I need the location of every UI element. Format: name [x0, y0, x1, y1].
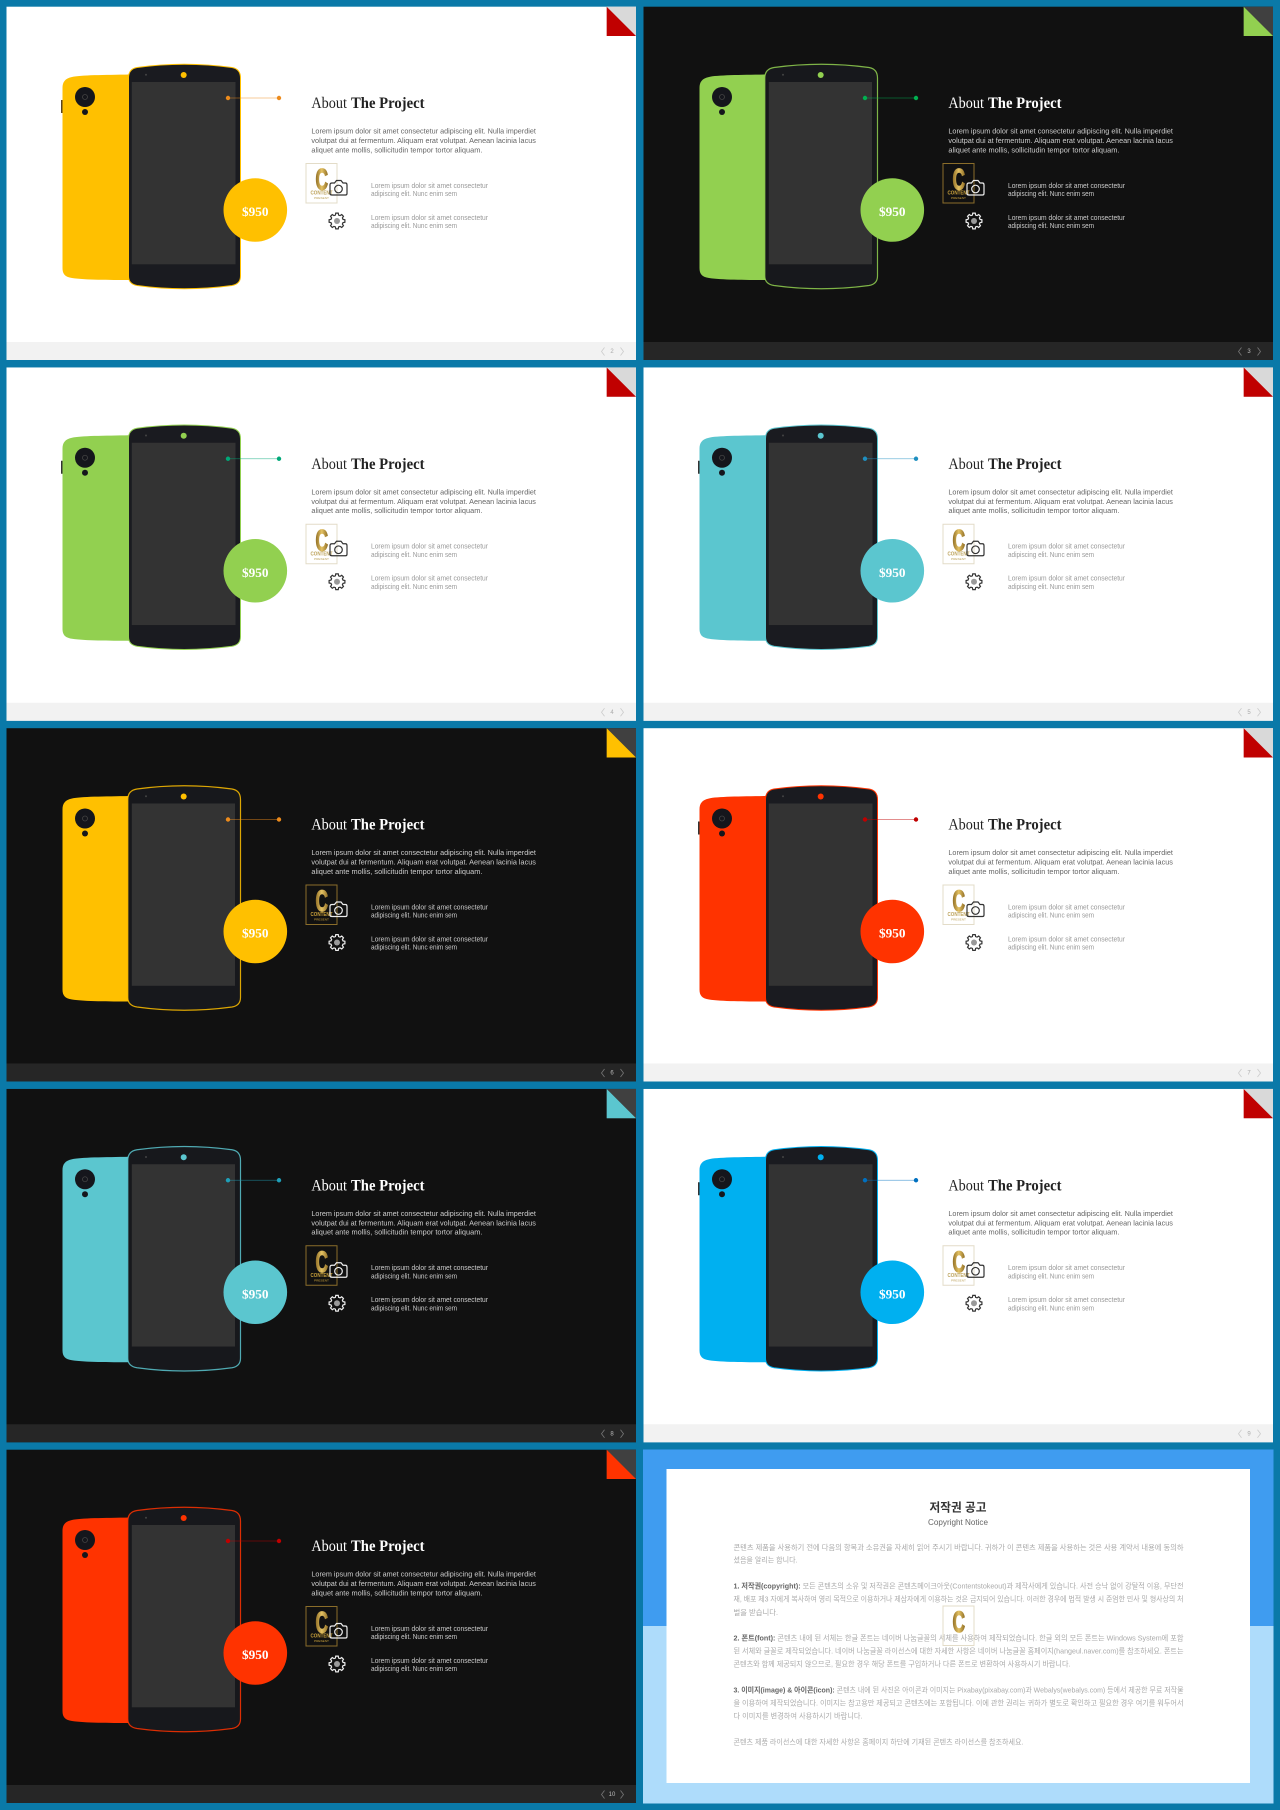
- feature text 2: [371, 1295, 489, 1312]
- notice section 1: 1. 저작권(copyright): 모든 콘텐츠의 소유 및 저작권은 콘텐츠메이크아웃(Contentstokeout)과 제작사에게 있습니다. 사전 승낙 없이 강탈적 이용, 무단전: [734, 1582, 1184, 1591]
- paragraph: aliquet ante mollis, sollicitudin tempor tortor aliquam.: [311, 506, 482, 515]
- feature text 1: adipiscing elit. Nunc enim sem: [371, 1271, 457, 1280]
- callout line: [226, 817, 281, 822]
- paragraph: volutpat dui at fermentum. Aliquam erat volutpat. Aenean lacinia lacus: [311, 1579, 536, 1588]
- feature text 1: [371, 902, 489, 920]
- corner fold: [1244, 728, 1273, 758]
- pagination: [1238, 1069, 1260, 1077]
- paragraph: [948, 126, 1174, 154]
- pagination: 8: [610, 1431, 614, 1437]
- logo: C: [316, 164, 328, 196]
- notice section 2: [734, 1634, 1184, 1669]
- pagination: 4: [610, 710, 614, 716]
- feature text 2: adipiscing elit. Nunc enim sem: [371, 1303, 457, 1312]
- feature text 1: adipiscing elit. Nunc enim sem: [1008, 1271, 1094, 1280]
- feature text 1: [1008, 902, 1126, 920]
- phone illustration: [698, 1146, 878, 1371]
- pagination: 9: [1247, 1431, 1251, 1437]
- price badge: [224, 900, 287, 963]
- paragraph: [311, 1570, 537, 1597]
- price badge: $950: [242, 1287, 268, 1301]
- callout line: [226, 457, 281, 461]
- paragraph: Lorem ipsum dolor sit amet consectetur adipiscing elit. Nulla imperdiet: [311, 848, 537, 857]
- paragraph: volutpat dui at fermentum. Aliquam erat volutpat. Aenean lacinia lacus: [311, 858, 536, 866]
- title: The Project: [988, 816, 1062, 834]
- feature text 1: Lorem ipsum dolor sit amet consectetur: [1008, 1263, 1126, 1272]
- paragraph: volutpat dui at fermentum. Aliquam erat volutpat. Aenean lacinia lacus: [948, 136, 1173, 145]
- paragraph: aliquet ante mollis, sollicitudin tempor tortor aliquam.: [948, 1228, 1119, 1237]
- notice heading: Copyright Notice: [928, 1518, 989, 1527]
- logo: CONTENT: [310, 912, 332, 918]
- paragraph: volutpat dui at fermentum. Aliquam erat volutpat. Aenean lacinia lacus: [948, 858, 1173, 866]
- notice section 1: [734, 1582, 1184, 1617]
- title: About: [948, 456, 985, 473]
- icon: camera: [967, 180, 984, 195]
- feature text 2: [1008, 213, 1126, 230]
- title: About: [311, 816, 348, 834]
- phone illustration: [700, 64, 878, 289]
- logo: [943, 164, 974, 203]
- feature text 2: [371, 213, 489, 230]
- logo: [306, 1606, 337, 1646]
- corner fold: [1244, 7, 1273, 36]
- icon: camera: [330, 1624, 347, 1638]
- feature text 2: [1008, 1295, 1126, 1312]
- icon: gear: [329, 1656, 345, 1672]
- icon: gear: [966, 935, 982, 950]
- icon: camera: [967, 1263, 984, 1277]
- feature text 2: adipiscing elit. Nunc enim sem: [371, 582, 457, 591]
- price badge: $950: [242, 926, 268, 940]
- logo: PRESENT: [951, 1278, 966, 1282]
- callout line: [226, 96, 281, 100]
- logo: PRESENT: [951, 196, 966, 200]
- logo: CONTENT: [948, 1273, 970, 1279]
- title: [311, 456, 425, 473]
- logo: C: [952, 885, 965, 918]
- price badge: [860, 178, 924, 242]
- feature text 2: adipiscing elit. Nunc enim sem: [1008, 221, 1094, 230]
- feature text 1: Lorem ipsum dolor sit amet consectetur: [371, 181, 489, 190]
- paragraph: [948, 1209, 1174, 1237]
- notice heading: 저작권 공고: [930, 1500, 986, 1514]
- callout line: [863, 96, 918, 100]
- logo: PRESENT: [951, 918, 966, 922]
- pagination: 3: [1247, 349, 1251, 355]
- pagination: 6: [610, 1070, 614, 1076]
- feature text 2: [371, 1656, 489, 1673]
- feature text 2: [1008, 934, 1126, 952]
- panel: slide 9 blue on white: [644, 1089, 1273, 1442]
- logo: C: [952, 1246, 965, 1279]
- paragraph: Lorem ipsum dolor sit amet consectetur adipiscing elit. Nulla imperdiet: [311, 487, 537, 496]
- title: [311, 1538, 425, 1555]
- price badge: [224, 1621, 287, 1685]
- feature text 1: [371, 1624, 489, 1641]
- corner fold: [607, 367, 636, 397]
- notice section 2: 된 서체와 글꼴로 제작되었습니다. 네이버 나눔글꼴 라이선스에 대한 자세한 사항은 네이버 나눔글꼴 홈페이지(hangeul.naver.com)를 참조하세요. 폰트는: [734, 1647, 1184, 1656]
- feature text 2: [371, 934, 489, 952]
- price badge: [860, 1260, 924, 1324]
- feature text 1: Lorem ipsum dolor sit amet consectetur: [371, 1624, 489, 1633]
- logo: PRESENT: [314, 1639, 329, 1643]
- paragraph: [311, 848, 537, 876]
- notice section 3: 을 이용하여 제작되었습니다. 이미지는 참고용만 제공되고 콘텐츠에는 포함됩니다. 이에 관한 권리는 귀하가 별도로 확인하고 필요한 경우 여기를 워두어서: [734, 1699, 1184, 1708]
- pagination: 5: [1247, 710, 1251, 716]
- logo: [306, 524, 337, 564]
- paragraph: [311, 1209, 537, 1237]
- feature text 2: adipiscing elit. Nunc enim sem: [1008, 582, 1094, 591]
- feature text 2: adipiscing elit. Nunc enim sem: [371, 221, 457, 230]
- title: [311, 1177, 425, 1194]
- paragraph: Lorem ipsum dolor sit amet consectetur adipiscing elit. Nulla imperdiet: [948, 126, 1174, 136]
- icon: gear: [966, 574, 982, 590]
- title: About: [311, 1177, 348, 1194]
- title: The Project: [988, 456, 1062, 473]
- pagination: [602, 1069, 624, 1077]
- title: About: [948, 95, 985, 112]
- paragraph: [948, 848, 1174, 876]
- feature text 1: adipiscing elit. Nunc enim sem: [1008, 911, 1094, 920]
- feature text 1: Lorem ipsum dolor sit amet consectetur: [371, 1263, 489, 1272]
- notice intro: 셨음을 알리는 합니다.: [734, 1556, 798, 1565]
- corner fold: [607, 1089, 636, 1118]
- feature text 2: Lorem ipsum dolor sit amet consectetur: [1008, 934, 1126, 943]
- price badge: [224, 178, 287, 242]
- title: About: [311, 95, 348, 112]
- panel: slide 3 green on black: [644, 7, 1273, 360]
- title: About: [311, 456, 348, 473]
- logo: [306, 885, 337, 924]
- logo: [943, 1246, 974, 1285]
- paragraph: [311, 126, 537, 154]
- feature text 1: Lorem ipsum dolor sit amet consectetur: [371, 542, 489, 551]
- paragraph: aliquet ante mollis, sollicitudin tempor tortor aliquam.: [948, 867, 1119, 876]
- title: [948, 95, 1062, 112]
- notice section 3: [734, 1686, 1184, 1721]
- panel: slide 4 green on white: [6, 367, 636, 721]
- callout line: [863, 1178, 918, 1182]
- feature text 2: [1008, 574, 1126, 591]
- paragraph: aliquet ante mollis, sollicitudin tempor tortor aliquam.: [311, 1588, 482, 1597]
- feature text 2: adipiscing elit. Nunc enim sem: [1008, 1303, 1094, 1312]
- feature text 2: Lorem ipsum dolor sit amet consectetur: [371, 213, 489, 222]
- logo: PRESENT: [314, 557, 329, 561]
- icon: gear: [329, 213, 345, 229]
- logo: CONTENT: [310, 190, 332, 196]
- corner fold: [607, 728, 636, 758]
- paragraph: volutpat dui at fermentum. Aliquam erat volutpat. Aenean lacinia lacus: [948, 497, 1173, 506]
- logo: C: [316, 1606, 328, 1640]
- panel: slide 7 red on white: [644, 728, 1273, 1082]
- feature text 2: Lorem ipsum dolor sit amet consectetur: [371, 1656, 489, 1665]
- paragraph: aliquet ante mollis, sollicitudin tempor tortor aliquam.: [948, 506, 1119, 515]
- title: The Project: [351, 1538, 425, 1555]
- phone illustration: [61, 425, 240, 650]
- paragraph: aliquet ante mollis, sollicitudin tempor tortor aliquam.: [311, 1228, 482, 1237]
- paragraph: volutpat dui at fermentum. Aliquam erat volutpat. Aenean lacinia lacus: [948, 1218, 1173, 1227]
- logo watermark: C: [952, 1606, 965, 1639]
- icon: gear: [329, 574, 345, 590]
- notice section 3: 3. 이미지(image) & 아이콘(icon): 콘텐츠 내에 된 사진은 아이콘과 이미지는 Pixabay(pixabay.com)과 Webalys(webalys.com) 등에서 제공한 무료 저작물: [734, 1686, 1184, 1695]
- icon: camera: [330, 902, 347, 916]
- feature text 2: Lorem ipsum dolor sit amet consectetur: [371, 1295, 489, 1304]
- pagination: [1238, 1430, 1260, 1438]
- title: The Project: [351, 456, 425, 473]
- pagination: 10: [609, 1792, 616, 1798]
- feature text 2: Lorem ipsum dolor sit amet consectetur: [1008, 213, 1126, 222]
- pagination: [602, 708, 624, 716]
- paragraph: volutpat dui at fermentum. Aliquam erat volutpat. Aenean lacinia lacus: [311, 1218, 536, 1227]
- feature text 1: [371, 542, 489, 559]
- pagination: [1238, 348, 1260, 356]
- logo: [306, 1246, 337, 1285]
- paragraph: Lorem ipsum dolor sit amet consectetur adipiscing elit. Nulla imperdiet: [948, 487, 1174, 496]
- callout line: [863, 457, 918, 461]
- pagination: [602, 1430, 624, 1438]
- logo: CONTENT: [948, 551, 970, 557]
- feature text 1: [371, 1263, 489, 1280]
- feature text 1: Lorem ipsum dolor sit amet consectetur: [371, 902, 489, 911]
- paragraph: aliquet ante mollis, sollicitudin tempor tortor aliquam.: [311, 145, 482, 154]
- title: The Project: [351, 95, 425, 112]
- logo: C: [316, 524, 328, 557]
- phone illustration: [62, 1507, 240, 1732]
- phone illustration: [61, 64, 240, 289]
- price badge: $950: [879, 1287, 906, 1301]
- title: [948, 1177, 1062, 1194]
- notice section 2: 2. 폰트(font): 콘텐츠 내에 된 서체는 한글 폰트는 네이버 나눔글꼴의 서체를 사용하여 제작되었습니다. 한글 외의 모든 폰트는 Windows System에 포함: [734, 1634, 1184, 1643]
- pagination: 7: [1247, 1070, 1251, 1076]
- feature text 2: Lorem ipsum dolor sit amet consectetur: [1008, 574, 1126, 583]
- feature text 1: adipiscing elit. Nunc enim sem: [371, 550, 457, 559]
- panel: copyright notice: [643, 1450, 1274, 1804]
- title: The Project: [351, 1177, 425, 1194]
- price badge: $950: [879, 566, 906, 580]
- corner fold: [607, 1450, 636, 1479]
- pagination: [1238, 708, 1260, 716]
- logo: CONTENT: [948, 190, 970, 196]
- title: About: [311, 1538, 348, 1555]
- title: The Project: [351, 816, 425, 834]
- phone illustration: [698, 425, 878, 650]
- notice footer text: 콘텐츠 제품 라이선스에 대한 자세한 사항은 홈페이지 하단에 기재된 콘텐츠 라이선스를 참조하세요.: [734, 1738, 1024, 1747]
- corner fold: [1244, 1089, 1273, 1118]
- paragraph: Lorem ipsum dolor sit amet consectetur adipiscing elit. Nulla imperdiet: [948, 848, 1174, 857]
- notice section 2: 콘텐츠와 함께 제공되지 않으므로, 필요한 경우 해당 폰트를 구입하거나 다른 폰트로 변환하여 사용하시기 바랍니다.: [734, 1660, 1070, 1669]
- logo: [306, 164, 337, 203]
- price badge: $950: [242, 205, 268, 219]
- price badge: $950: [879, 926, 906, 940]
- feature text 1: adipiscing elit. Nunc enim sem: [371, 189, 457, 198]
- pagination: [602, 348, 624, 356]
- icon: camera: [967, 902, 984, 916]
- phone illustration: [62, 1146, 240, 1371]
- feature text 1: adipiscing elit. Nunc enim sem: [1008, 550, 1094, 559]
- price badge: $950: [879, 205, 906, 219]
- price badge: [860, 900, 924, 963]
- feature text 1: Lorem ipsum dolor sit amet consectetur: [1008, 181, 1126, 190]
- callout line: [226, 1178, 281, 1182]
- price badge: [860, 539, 924, 603]
- corner fold: [607, 7, 636, 36]
- icon: gear: [329, 1295, 345, 1311]
- logo: PRESENT: [314, 196, 329, 200]
- feature text 2: adipiscing elit. Nunc enim sem: [371, 943, 457, 952]
- feature text 2: adipiscing elit. Nunc enim sem: [371, 1664, 457, 1673]
- title: [311, 95, 425, 112]
- panel: slide 5 teal on white: [644, 367, 1273, 721]
- panel: slide 2 yellow on white: [6, 7, 636, 360]
- logo: PRESENT: [951, 557, 966, 561]
- logo: C: [952, 164, 965, 196]
- logo: [943, 524, 974, 564]
- logo: C: [316, 885, 328, 918]
- price badge: [224, 539, 287, 603]
- logo: [943, 885, 974, 924]
- icon: camera: [967, 541, 984, 556]
- corner fold: [1244, 367, 1273, 397]
- feature text 2: Lorem ipsum dolor sit amet consectetur: [371, 934, 489, 943]
- price badge: $950: [242, 1648, 268, 1662]
- notice section 1: 재, 배포 제3 자에게 복사하여 영리 목적으로 이용하거나 제삼자에게 이용하는 것은 금지되어 있습니다. 이러한 경우에 법적 발생 시 준엄한 민사 및 형사상의 처: [734, 1594, 1184, 1603]
- paragraph: aliquet ante mollis, sollicitudin tempor tortor aliquam.: [311, 867, 482, 876]
- title: [948, 816, 1062, 834]
- feature text 1: [1008, 1263, 1126, 1280]
- paragraph: volutpat dui at fermentum. Aliquam erat volutpat. Aenean lacinia lacus: [311, 136, 536, 145]
- price badge: [224, 1260, 287, 1324]
- logo: CONTENT: [310, 551, 332, 557]
- feature text 1: adipiscing elit. Nunc enim sem: [371, 911, 457, 920]
- icon: gear: [966, 213, 982, 229]
- logo: CONTENT: [310, 1273, 332, 1279]
- title: The Project: [988, 1177, 1062, 1194]
- title: About: [948, 1177, 985, 1194]
- paragraph: Lorem ipsum dolor sit amet consectetur adipiscing elit. Nulla imperdiet: [311, 126, 537, 136]
- icon: camera: [330, 541, 347, 556]
- logo: CONTENT: [310, 1634, 332, 1640]
- feature text 1: adipiscing elit. Nunc enim sem: [371, 1632, 457, 1641]
- feature text 2: Lorem ipsum dolor sit amet consectetur: [1008, 1295, 1126, 1304]
- feature text 1: [1008, 542, 1126, 559]
- phone illustration: [62, 786, 240, 1010]
- paragraph: aliquet ante mollis, sollicitudin tempor tortor aliquam.: [948, 145, 1119, 154]
- panel: slide 10 red on black: [6, 1450, 636, 1803]
- paragraph: [948, 487, 1174, 515]
- notice section 3: 다 이미지를 변경하여 사용하시기 바랍니다.: [734, 1712, 862, 1721]
- phone illustration: [698, 786, 878, 1010]
- feature text 2: Lorem ipsum dolor sit amet consectetur: [371, 574, 489, 583]
- pagination: 2: [610, 349, 614, 355]
- logo: CONTENT: [948, 912, 970, 918]
- notice intro: [734, 1543, 1184, 1565]
- notice heading: [928, 1500, 989, 1527]
- title: [311, 816, 425, 834]
- title: The Project: [988, 95, 1062, 112]
- notice intro: 콘텐츠 제품을 사용하기 전에 다음의 항목과 소유권을 자세히 읽어 주시기 바랍니다. 귀하가 이 콘텐츠 제품을 사용하는 것은 사용 계약서 내용에 동의하: [734, 1543, 1184, 1552]
- feature text 1: adipiscing elit. Nunc enim sem: [1008, 189, 1094, 198]
- callout line: [863, 817, 918, 822]
- feature text 1: Lorem ipsum dolor sit amet consectetur: [1008, 902, 1126, 911]
- panel: slide 8 teal on black: [6, 1089, 636, 1442]
- icon: gear: [329, 935, 345, 950]
- icon: camera: [330, 1263, 347, 1277]
- price badge: $950: [242, 566, 268, 580]
- title: [948, 456, 1062, 473]
- feature text 2: [371, 574, 489, 591]
- pagination: [602, 1790, 624, 1798]
- logo watermark: [943, 1606, 974, 1646]
- title: About: [948, 816, 985, 834]
- paragraph: volutpat dui at fermentum. Aliquam erat volutpat. Aenean lacinia lacus: [311, 497, 536, 506]
- logo: C: [316, 1246, 328, 1279]
- feature text 1: [1008, 181, 1126, 198]
- paragraph: Lorem ipsum dolor sit amet consectetur adipiscing elit. Nulla imperdiet: [311, 1570, 537, 1578]
- paragraph: Lorem ipsum dolor sit amet consectetur adipiscing elit. Nulla imperdiet: [948, 1209, 1174, 1218]
- feature text 1: [371, 181, 489, 198]
- feature text 2: adipiscing elit. Nunc enim sem: [1008, 943, 1094, 952]
- feature text 1: Lorem ipsum dolor sit amet consectetur: [1008, 542, 1126, 551]
- logo: C: [952, 524, 965, 557]
- paragraph: Lorem ipsum dolor sit amet consectetur adipiscing elit. Nulla imperdiet: [311, 1209, 537, 1218]
- panel: slide 6 yellow on black: [6, 728, 636, 1082]
- logo: PRESENT: [314, 1278, 329, 1282]
- callout line: [226, 1539, 281, 1543]
- logo: PRESENT: [314, 918, 329, 922]
- icon: camera: [330, 180, 347, 195]
- notice section 1: 벌을 받습니다.: [734, 1608, 778, 1617]
- paragraph: [311, 487, 537, 515]
- icon: gear: [966, 1295, 982, 1311]
